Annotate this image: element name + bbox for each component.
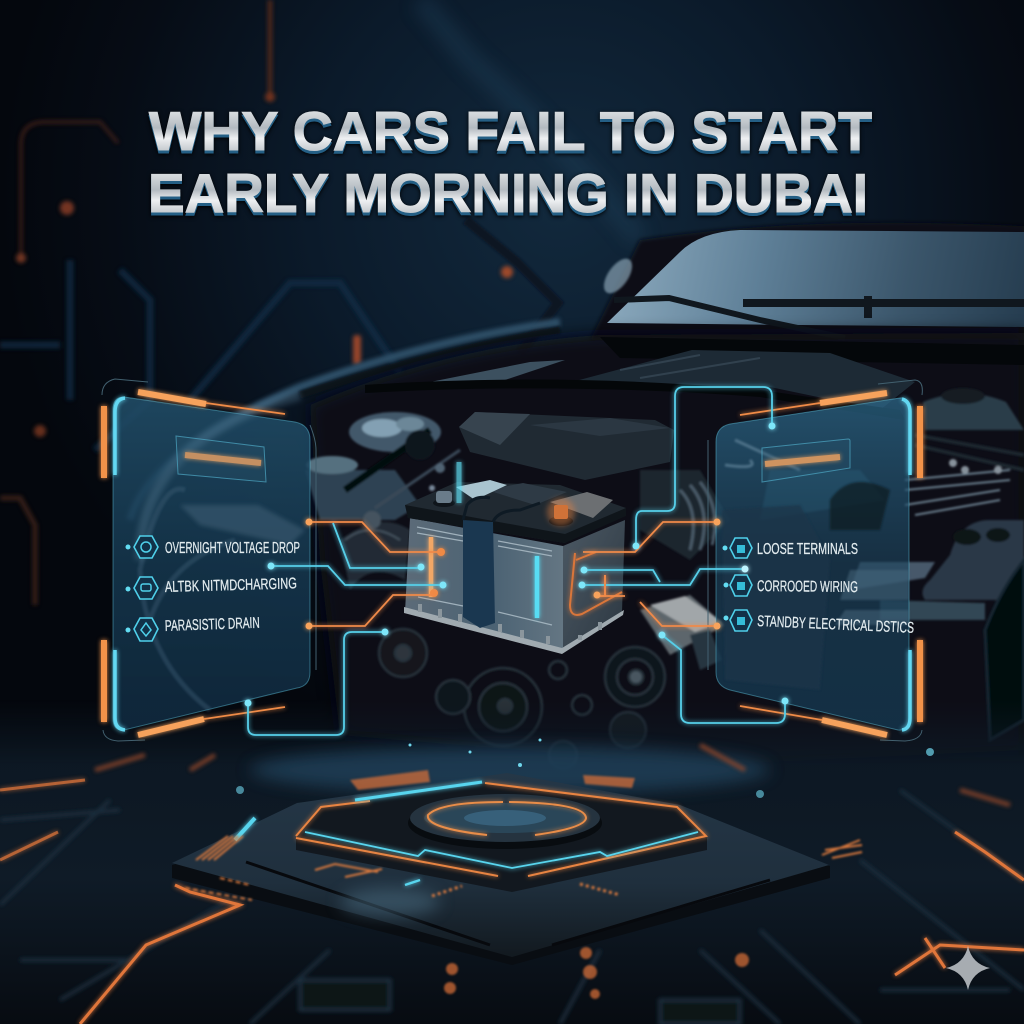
item: overnight voltage drop [126,536,300,558]
reflected engine shapes [722,440,909,690]
item: parasistic drain [126,615,260,641]
item: alternator undercharging: ALTBK NITMDCHARGING [165,575,297,596]
sparkle mark [946,946,990,990]
panel frame [102,379,316,741]
item: corrooed wiring [724,575,858,596]
floor particles [236,738,934,798]
positive terminal [547,498,575,526]
pulleys [379,629,665,769]
title: WHY CARS FAIL TO START [149,100,872,162]
reflected car shape [180,505,305,545]
cyan energy beam [456,462,462,503]
battery front face [405,518,563,650]
right glass panel [708,380,923,741]
item: corrooed wiring: CORROOED WIRING [757,578,858,596]
title: EARLY MORNING IN DUBAI [148,162,868,224]
panel frame [708,380,922,741]
item: parasistic drain: PARASISTIC DRAIN [165,615,260,635]
item: alternator undercharging [126,575,297,599]
hexagonal platform [172,773,862,965]
left components [305,412,460,590]
base clips [420,604,600,644]
inner hexagon [296,783,707,892]
hood intake panel [425,360,565,385]
item: overnight voltage drop: OVERNIGHT VOLTAGE DROP [165,540,300,557]
header box [762,439,850,482]
highlight [340,888,440,916]
platform orange details [185,836,862,900]
item: loose terminals [722,538,858,558]
engine bay [305,333,1024,769]
battery details [417,527,552,625]
battery strap [463,520,495,628]
orange front glow [430,537,445,597]
car battery [404,462,626,654]
orange traces [0,780,1024,1024]
circuit floor [0,700,1024,1024]
faint background circuit traces [0,0,513,605]
orange accent bars [101,392,285,735]
left connectors [244,518,446,735]
cyan platform lines [235,782,698,885]
platform outer plate [172,775,830,965]
header box [176,436,266,482]
cyan edge bars [115,398,125,730]
right components [640,388,1024,740]
center ring [408,794,602,849]
battery base [404,607,624,654]
car hood arc [130,322,560,520]
right connectors [578,387,788,723]
item: loose terminals: LOOSE TERMINALS [757,541,858,558]
upper cover [568,350,915,410]
left glass panel [101,379,316,741]
battery top [405,482,626,543]
orange side outline [570,552,622,615]
engine cover [459,412,674,480]
cyan front glow [535,556,539,618]
negative terminal [433,491,455,507]
car windshield and wipers [466,220,1024,353]
battery side face [563,520,625,650]
orange accent bars [740,393,923,735]
title [148,100,872,224]
item: standby electrical dstics [724,610,914,637]
cyan edge bars [902,399,910,730]
item: standby electrical dstics: STANDBY ELECTRICAL DSTICS [757,613,914,637]
